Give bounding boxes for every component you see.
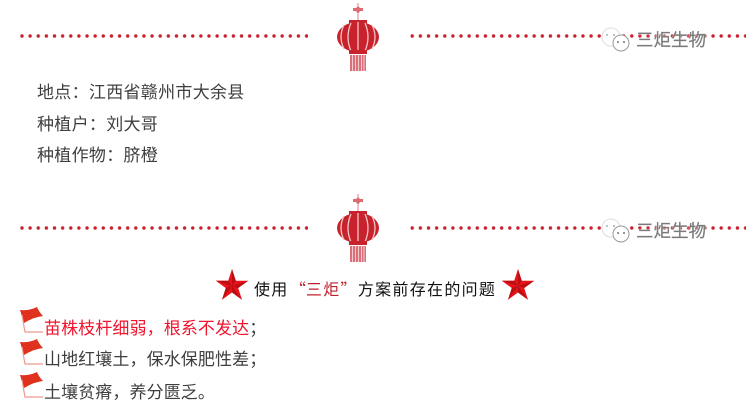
list item 3: 土壤贫瘠，养分匮乏。 (44, 383, 215, 402)
icon: star right (502, 269, 534, 300)
info: location: 地点：江西省赣州市大余县 (37, 83, 245, 102)
icon: star left (216, 269, 248, 300)
info: grower: 种植户：刘大哥 (37, 115, 158, 134)
icon: flag 1 (20, 307, 43, 332)
list item 2: 山地红壤土，保水保肥性差； (44, 350, 266, 369)
watermark text 2: 三炬生物 (636, 221, 706, 241)
info: crop: 种植作物：脐橙 (37, 146, 158, 165)
heading: problems before using the plan: “ (290, 276, 306, 300)
icon: flag 3 (20, 372, 43, 397)
icon: watermark bubbles 1 (602, 28, 629, 51)
icon: lantern 1 (337, 3, 379, 71)
heading: problems before using the plan: 使用 三炬 方案前存在的问题 (254, 282, 496, 299)
divider 2 (20, 224, 746, 232)
list item 1: 苗株枝杆细弱，根系不发达； (44, 319, 266, 338)
icon: lantern 2 (337, 194, 379, 262)
watermark text 1: 三炬生物 (636, 30, 706, 50)
icon: flag 2 (20, 339, 43, 364)
divider 1 (20, 32, 746, 40)
icon: watermark bubbles 2 (602, 219, 629, 242)
heading: problems before using the plan: ” (341, 276, 357, 300)
